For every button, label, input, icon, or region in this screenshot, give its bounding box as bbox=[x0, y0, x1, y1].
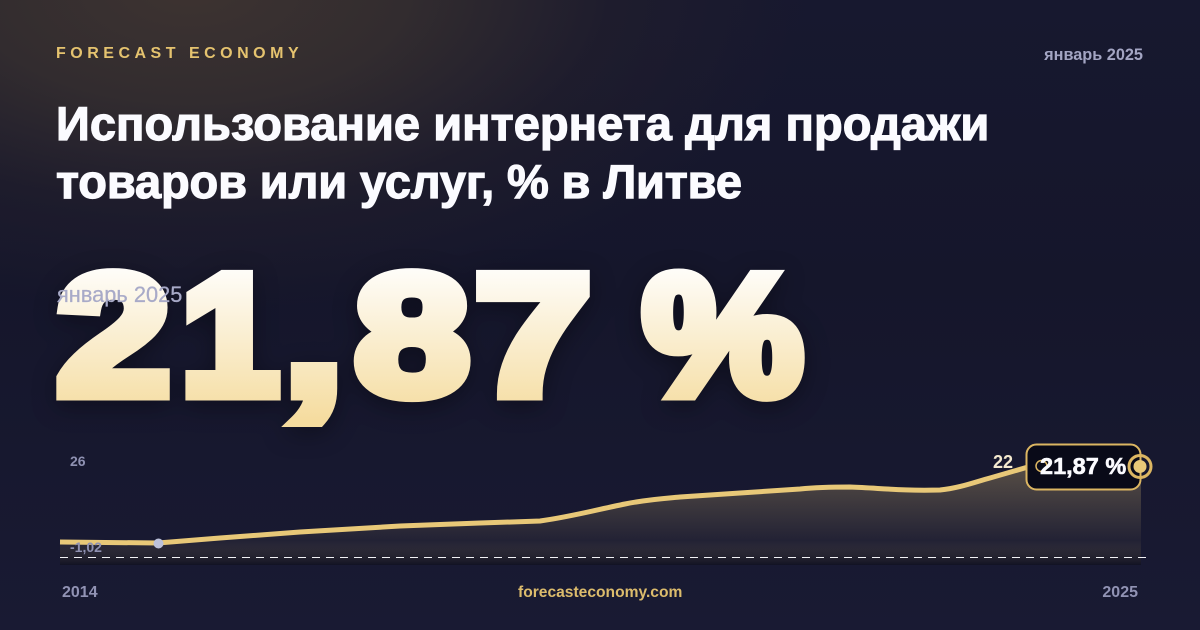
title bbox=[56, 97, 989, 209]
title: Использование интернета для продажи bbox=[56, 97, 989, 150]
axis max label: 26 bbox=[70, 453, 86, 469]
big value: 1 bbox=[181, 239, 279, 430]
date top right: январь 2025 bbox=[1044, 46, 1143, 64]
big value: 7 bbox=[475, 240, 591, 431]
title: товаров или услуг, % в Литве bbox=[56, 155, 742, 208]
big value: , bbox=[284, 240, 343, 431]
overlapping date label: январь 2025 bbox=[57, 282, 182, 307]
line chart bbox=[60, 444, 1152, 565]
start point marker bbox=[154, 538, 164, 548]
source url: forecasteconomy.com bbox=[518, 584, 682, 601]
baseline dashed bbox=[60, 556, 1146, 558]
callout marker bbox=[1026, 444, 1151, 490]
end label 22: 22 bbox=[993, 452, 1013, 472]
area under line bbox=[60, 468, 1141, 565]
big value: % bbox=[643, 240, 803, 431]
data line bbox=[60, 467, 1028, 543]
brand label: FORECAST ECONOMY bbox=[56, 45, 303, 62]
end year: 2025 bbox=[1102, 584, 1138, 601]
callout value: 21,87 % bbox=[1040, 453, 1126, 479]
start year: 2014 bbox=[62, 584, 98, 601]
big value bbox=[56, 239, 805, 432]
big value: 2 bbox=[57, 239, 170, 430]
axis min label: -1,02 bbox=[70, 539, 102, 555]
big value: 8 bbox=[355, 240, 469, 431]
